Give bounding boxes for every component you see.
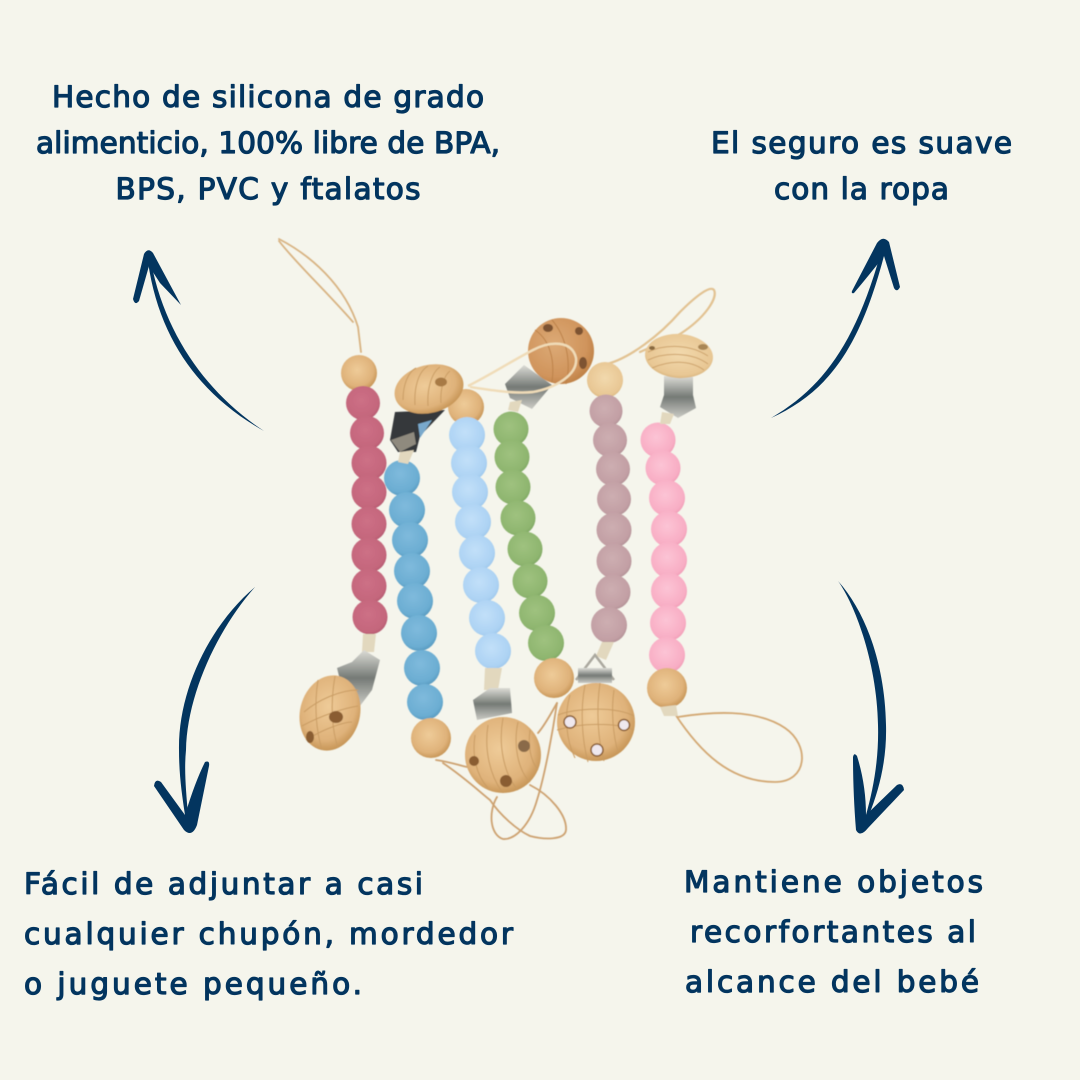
strand: light blue <box>448 389 511 690</box>
product photo: six pacifier clips <box>279 239 802 839</box>
clip: top right <box>644 332 714 424</box>
strand: blue <box>384 460 451 758</box>
arrow: top right <box>771 239 900 418</box>
clip: bottom right <box>557 655 635 762</box>
text: bottom left feature: Fácil de adjuntar a casi <box>24 867 423 901</box>
arrow: bottom right <box>838 581 904 834</box>
text: top right feature: El seguro es suave <box>711 126 1012 160</box>
text: bottom left feature: cualquier chupón, mordedor <box>24 917 514 951</box>
text: bottom left feature <box>24 867 514 1001</box>
clip: top center <box>468 318 594 412</box>
text: top left feature <box>36 80 500 206</box>
cords <box>279 239 802 839</box>
text: bottom right feature: Mantiene objetos <box>684 865 983 899</box>
text: top left feature: Hecho de silicona de grado <box>52 80 484 114</box>
text: bottom left feature: o juguete pequeño. <box>24 967 362 1001</box>
text: bottom right feature: alcance del bebé <box>685 965 979 999</box>
strand: rose <box>341 355 388 652</box>
text: top right feature: con la ropa <box>774 172 949 206</box>
strand: mauve <box>587 362 632 660</box>
text: top left feature: BPS, PVC y ftalatos <box>116 172 420 206</box>
clip: bottom center <box>465 688 541 793</box>
strand: green <box>494 412 574 698</box>
text: bottom right feature <box>684 865 983 999</box>
arrow: bottom left <box>154 587 255 833</box>
strand: pink <box>640 422 687 716</box>
text: bottom right feature: recorfortantes al <box>690 915 976 949</box>
text: top left feature: alimenticio, 100% libre de BPA, <box>36 126 500 160</box>
text: top right feature <box>711 126 1012 206</box>
clip: bottom left <box>292 650 380 757</box>
clip: top left <box>389 357 469 464</box>
arrow: top left <box>133 250 264 431</box>
